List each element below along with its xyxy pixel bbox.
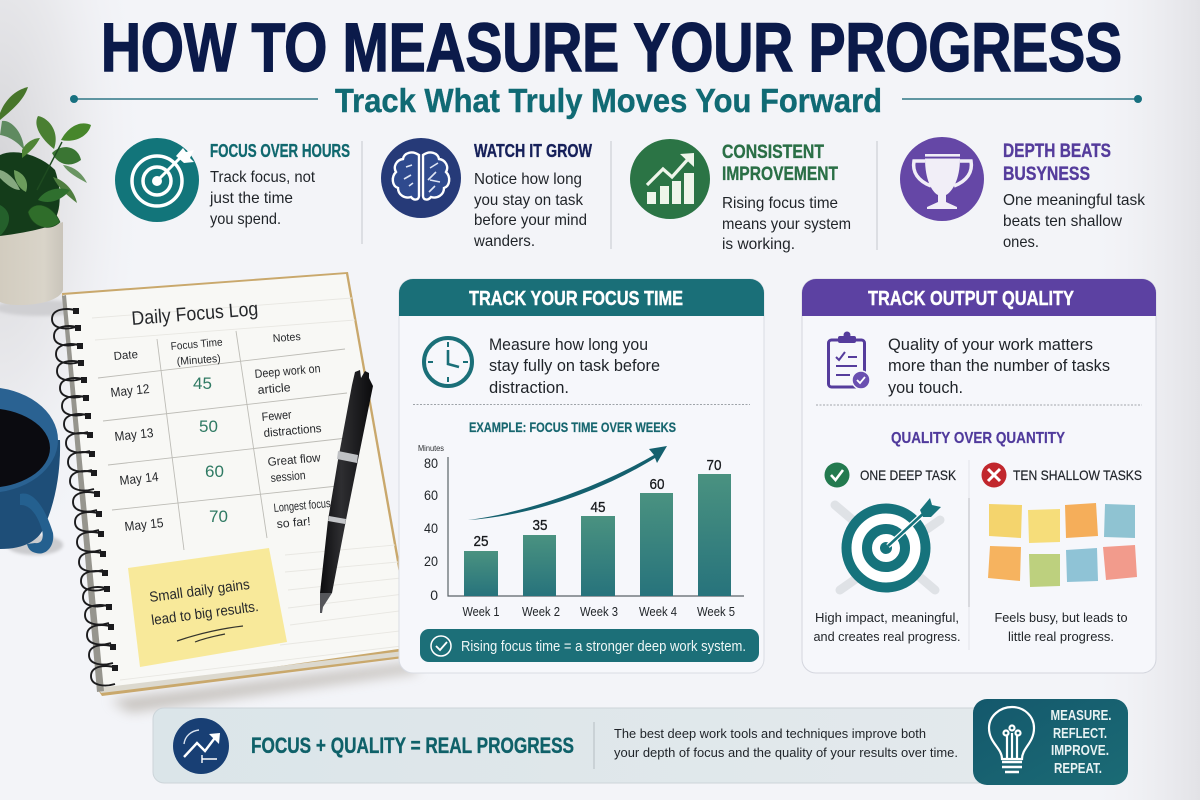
bar chart: 80	[424, 455, 438, 471]
feature: watch it grow: before your mind	[474, 212, 587, 229]
log table text: 70	[209, 507, 228, 526]
icon: brain	[381, 138, 461, 218]
bar chart: Week 3	[580, 604, 618, 619]
log table text: 50	[199, 417, 218, 436]
log table text: Fewer	[261, 407, 292, 424]
one deep task: and creates real progress.	[814, 629, 960, 644]
icon: large target	[835, 498, 941, 590]
quality description	[888, 336, 1110, 397]
log table text: article	[257, 380, 291, 397]
feature: consistent improvement: means your system	[722, 216, 851, 233]
chart heading: EXAMPLE: FOCUS TIME OVER WEEKS	[469, 419, 676, 435]
log table text: Great flow	[267, 450, 321, 469]
feature: depth beats busyness: ones.	[1003, 234, 1039, 251]
callout: measure reflect improve repeat: IMPROVE.	[1051, 742, 1109, 759]
log table text: Longest focus	[273, 496, 331, 515]
one deep task: High impact, meaningful,	[815, 610, 959, 625]
bar chart: 40	[424, 520, 438, 536]
feature: watch it grow	[473, 140, 592, 250]
icon: trophy	[900, 137, 984, 221]
log table text: so far!	[276, 514, 311, 531]
one deep task	[814, 462, 960, 644]
bar chart: 60	[650, 476, 664, 493]
bottom banner	[153, 699, 1128, 785]
bar chart: 70	[706, 457, 722, 474]
icon: growth chart	[630, 139, 710, 219]
banner text: The best deep work tools and techniques improve both	[614, 726, 926, 741]
bar chart: Week 1	[462, 604, 500, 619]
feature: depth beats busyness: DEPTH BEATS	[1003, 140, 1111, 162]
feature: focus over hours	[209, 140, 350, 228]
quality description: more than the number of tasks	[888, 357, 1110, 375]
icon: clock	[424, 338, 472, 386]
panel header: TRACK OUTPUT QUALITY	[868, 288, 1075, 310]
sticky note: lead to big results.	[150, 599, 260, 629]
bar chart: 35	[532, 517, 548, 534]
log table grid	[98, 331, 347, 550]
ten shallow tasks	[982, 462, 1142, 644]
subtitle with rule lines	[70, 82, 1142, 119]
icon: clipboard	[828, 332, 870, 389]
log table text	[110, 331, 331, 534]
log table text: May 12	[110, 381, 150, 400]
banner text	[614, 726, 958, 760]
callout: rising focus: Rising focus time = a stronger deep work system.	[461, 639, 746, 655]
ten shallow tasks: little real progress.	[1008, 629, 1114, 644]
feature: watch it grow: wanders.	[473, 233, 535, 250]
feature: consistent improvement: CONSISTENT	[722, 141, 824, 163]
log table text: 45	[193, 374, 212, 393]
ten shallow tasks: Feels busy, but leads to	[994, 610, 1128, 625]
plant in pot	[0, 87, 91, 316]
log table text: distractions	[263, 421, 322, 440]
feature: consistent improvement	[722, 141, 851, 253]
panel header	[802, 279, 1156, 316]
callout: rising focus	[420, 629, 759, 662]
panel header	[399, 279, 764, 316]
panel: track output quality	[802, 279, 1156, 673]
feature: consistent improvement: is working.	[722, 236, 795, 253]
icon: light bulb	[989, 707, 1034, 772]
feature: focus over hours: you spend.	[210, 211, 281, 228]
feature: depth beats busyness	[1003, 140, 1146, 251]
log table text: Notes	[272, 331, 302, 345]
notebook: Daily Focus Log	[52, 272, 418, 712]
log table text: Date	[113, 349, 138, 363]
ten shallow tasks: TEN SHALLOW TASKS	[1013, 467, 1142, 483]
quality description: Quality of your work matters	[888, 336, 1093, 354]
bar chart	[418, 444, 744, 619]
bar chart: Week 4	[639, 604, 677, 619]
notebook cover and page	[62, 272, 415, 696]
pen	[320, 370, 373, 613]
arrow: rising trend	[468, 446, 667, 520]
feature: depth beats busyness: BUSYNESS	[1003, 163, 1090, 185]
bar chart: Minutes	[418, 444, 444, 453]
feature: consistent improvement: IMPROVEMENT	[722, 163, 838, 185]
feature: depth beats busyness: One meaningful task	[1003, 192, 1146, 209]
log heading: Daily Focus Log	[131, 298, 259, 330]
log table text: Deep work on	[254, 361, 321, 381]
sticky note	[128, 548, 287, 667]
banner headline: FOCUS + QUALITY = REAL PROGRESS	[251, 733, 574, 758]
log table text: session	[270, 468, 306, 485]
bar chart: 25	[474, 533, 488, 550]
sticky note: Small daily gains	[148, 577, 251, 606]
one deep task: ONE DEEP TASK	[860, 467, 957, 483]
focus description: distraction.	[489, 379, 569, 397]
callout: measure reflect improve repeat: REPEAT.	[1054, 760, 1102, 777]
callout: measure reflect improve repeat	[973, 699, 1128, 785]
subtitle with rule lines: Track What Truly Moves You Forward	[335, 82, 882, 119]
feature: focus over hours: just the time	[209, 190, 293, 207]
focus description	[489, 336, 660, 397]
callout: measure reflect improve repeat: REFLECT.	[1053, 725, 1107, 742]
feature: focus over hours: Track focus, not	[210, 169, 316, 186]
banner text: your depth of focus and the quality of your results over time.	[614, 745, 958, 760]
bar chart: 0	[430, 587, 438, 603]
bar chart: Week 5	[697, 604, 735, 619]
focus description: Measure how long you	[489, 336, 648, 354]
bar chart: 20	[424, 553, 438, 569]
quality heading: QUALITY OVER QUANTITY	[891, 430, 1065, 447]
panel header: TRACK YOUR FOCUS TIME	[469, 288, 683, 310]
icon: progress chart	[173, 718, 229, 774]
bar chart: Week 2	[522, 604, 560, 619]
feature: watch it grow: WATCH IT GROW	[474, 140, 592, 161]
log table text: 60	[205, 462, 224, 481]
log table text: May 15	[124, 515, 164, 534]
bar chart: 60	[424, 487, 438, 503]
feature: depth beats busyness: beats ten shallow	[1003, 213, 1122, 230]
log table text: May 13	[114, 425, 154, 444]
log table text: (Minutes)	[176, 353, 221, 368]
log table text: May 14	[119, 469, 159, 488]
feature: focus over hours: FOCUS OVER HOURS	[210, 140, 350, 161]
icon: target	[115, 138, 199, 222]
coffee mug	[0, 387, 63, 555]
callout: measure reflect improve repeat: MEASURE.	[1050, 707, 1112, 724]
sticky notes grid	[988, 503, 1137, 587]
log table text: Focus Time	[170, 337, 223, 353]
feature: consistent improvement: Rising focus time	[722, 195, 838, 212]
bar chart: 45	[590, 499, 606, 516]
focus description: stay fully on task before	[489, 357, 660, 375]
quality description: you touch.	[888, 379, 963, 397]
panel: track your focus time	[399, 279, 764, 673]
spiral binding	[52, 308, 118, 685]
feature: watch it grow: you stay on task	[474, 192, 584, 209]
feature: watch it grow: Notice how long	[474, 171, 582, 188]
